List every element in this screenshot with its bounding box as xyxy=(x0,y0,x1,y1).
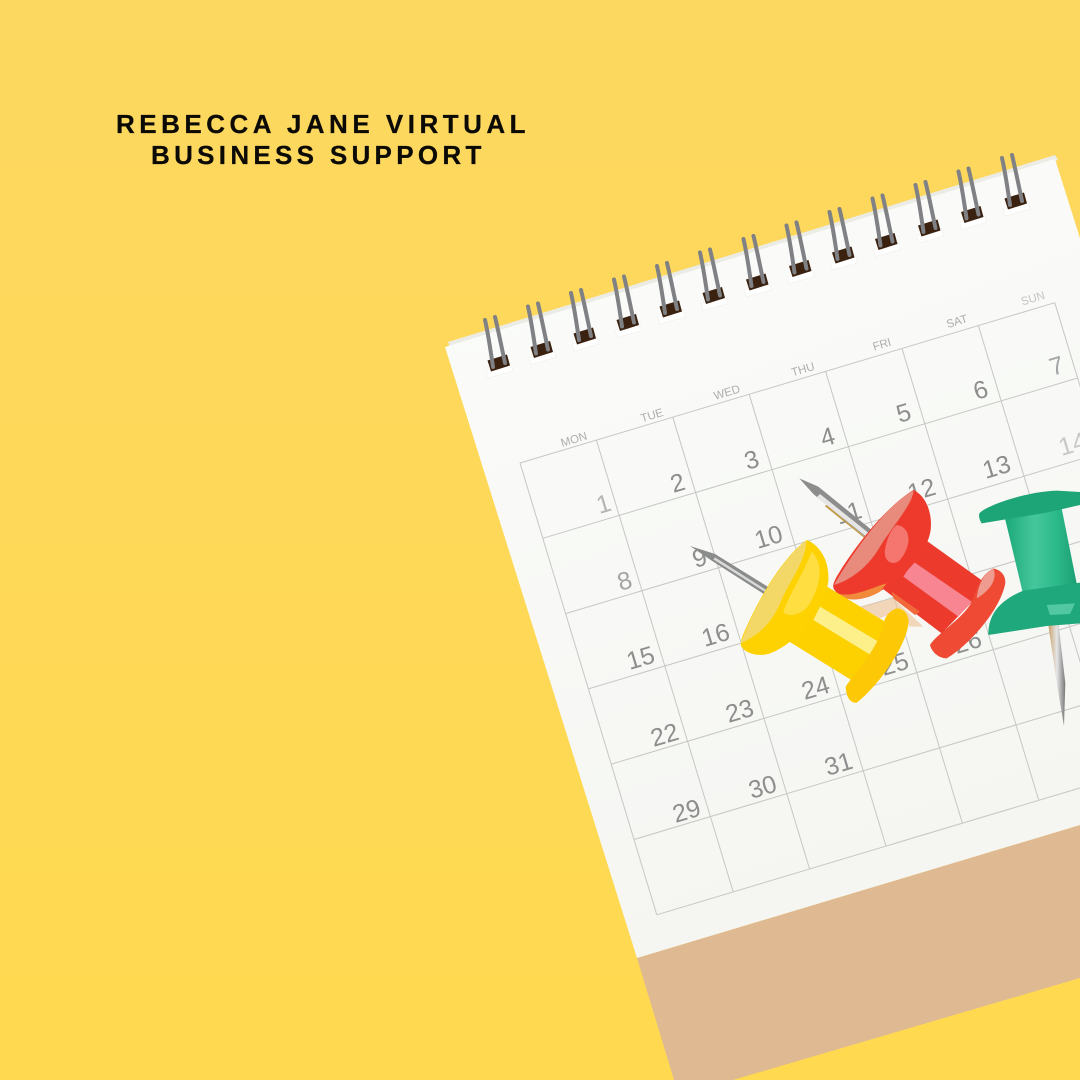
title: BUSINESS SUPPORT xyxy=(151,140,486,170)
title: REBECCA JANE VIRTUAL xyxy=(116,109,530,139)
calendar date numbers: 7 xyxy=(1046,351,1067,382)
weekday labels xyxy=(560,290,1046,450)
calendar date numbers: 2 xyxy=(667,468,688,499)
calendar date numbers: 5 xyxy=(893,398,914,429)
icon: yellow push pin xyxy=(690,540,909,703)
push pins xyxy=(690,478,1080,726)
shadow between yellow and red pins xyxy=(860,598,923,627)
calendar backing board xyxy=(637,825,1080,1080)
calendar date numbers: 13 xyxy=(979,450,1014,485)
calendar date numbers: 29 xyxy=(669,794,704,829)
calendar grid xyxy=(520,303,1080,915)
calendar date numbers: 4 xyxy=(817,422,838,453)
spiral binding xyxy=(485,155,1030,378)
calendar date numbers: 10 xyxy=(751,520,786,555)
weekday labels: FRI xyxy=(872,337,893,354)
calendar date numbers: 1 xyxy=(593,489,614,520)
calendar page xyxy=(445,155,1080,958)
calendar date numbers: 25 xyxy=(877,647,912,682)
calendar date numbers: 16 xyxy=(698,618,733,653)
calendar date numbers: 31 xyxy=(821,747,856,782)
calendar date numbers: 30 xyxy=(745,770,780,805)
calendar date numbers: 8 xyxy=(614,566,635,597)
icon: green push pin xyxy=(979,491,1080,726)
calendar date numbers: 23 xyxy=(722,694,757,729)
icon: red push pin xyxy=(799,478,1005,658)
weekday labels: SUN xyxy=(1020,290,1046,308)
calendar date numbers: 3 xyxy=(741,445,762,476)
calendar date numbers: 12 xyxy=(904,473,939,508)
weekday labels: MON xyxy=(560,431,589,450)
calendar date numbers: 22 xyxy=(647,718,682,753)
calendar date numbers: 15 xyxy=(623,641,658,676)
title xyxy=(116,109,530,170)
weekday labels: TUE xyxy=(639,407,665,425)
calendar date numbers: 24 xyxy=(798,671,833,706)
weekday labels: SAT xyxy=(945,313,969,331)
weekday labels: THU xyxy=(790,361,816,379)
weekday labels: WED xyxy=(713,384,742,403)
calendar date numbers xyxy=(593,351,1080,829)
calendar date numbers: 26 xyxy=(950,625,985,660)
calendar date numbers: 6 xyxy=(970,375,991,406)
calendar date numbers: 11 xyxy=(832,496,865,530)
calendar date numbers: 9 xyxy=(689,543,710,574)
